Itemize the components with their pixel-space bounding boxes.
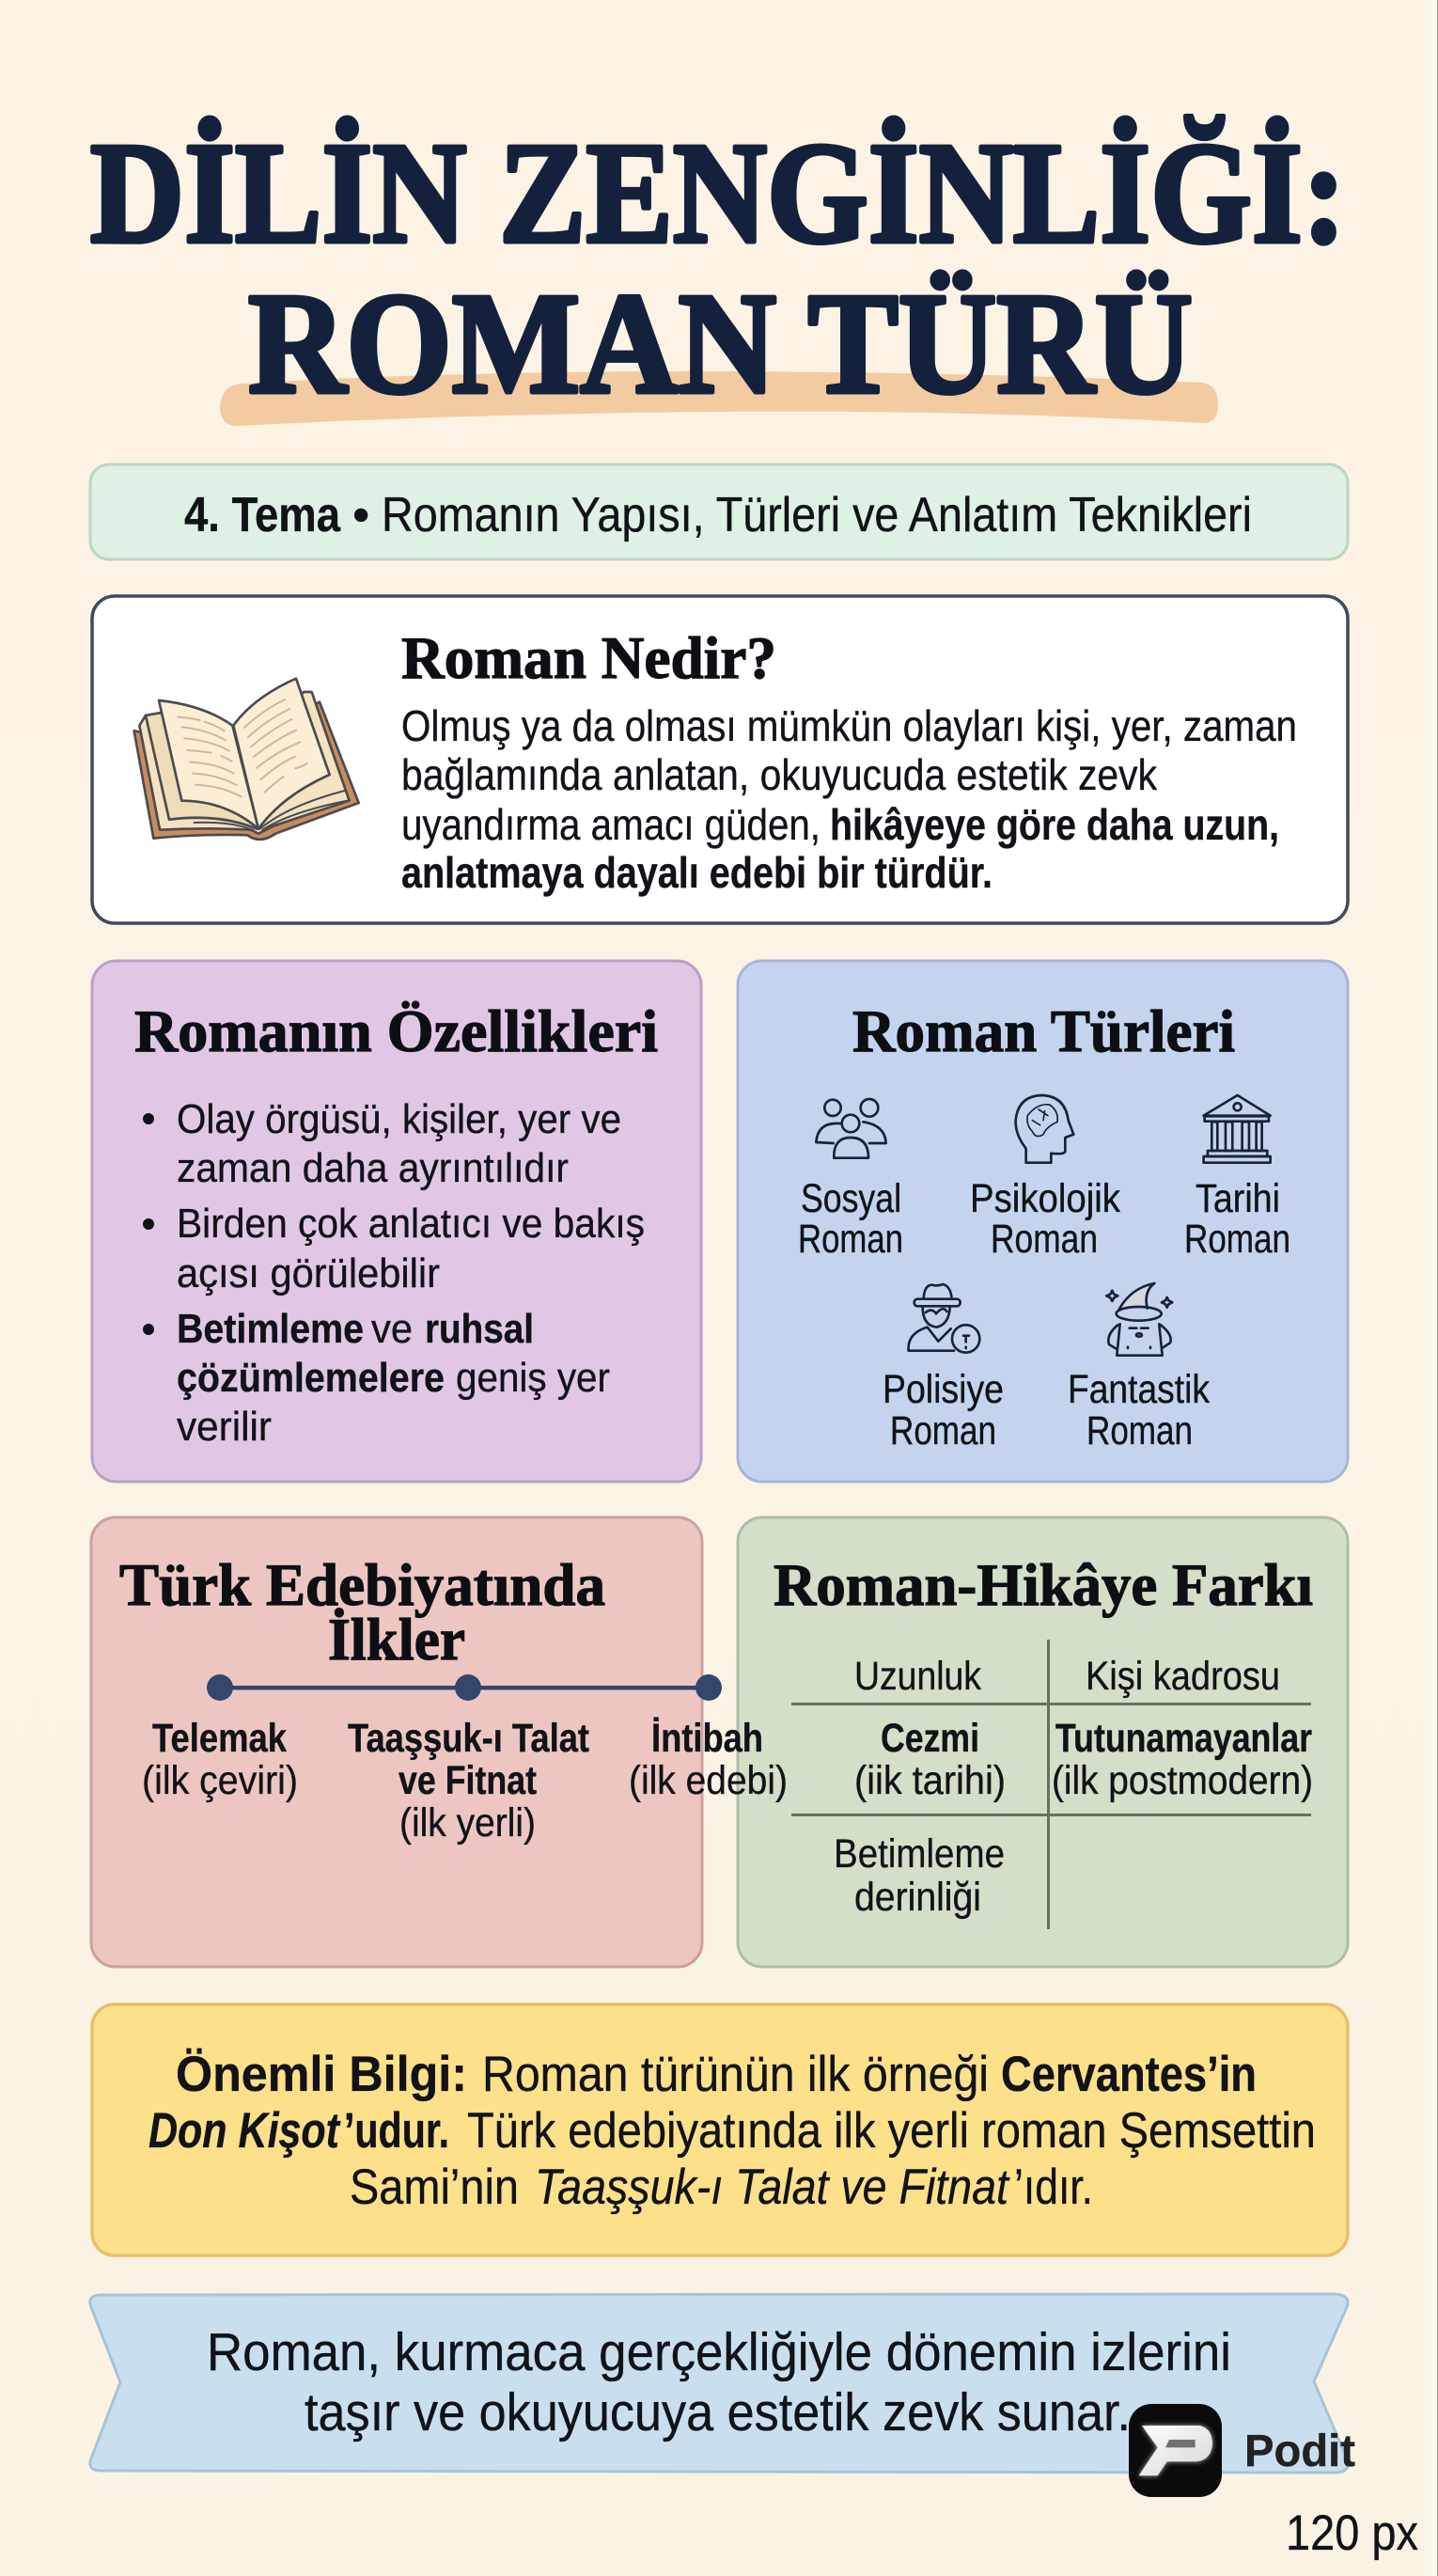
- title: ROMAN TÜRÜ: [248, 264, 1193, 424]
- ribbon: closing message: taşır ve okuyucuya estetik zevk sunar.: [305, 2382, 1131, 2442]
- bullet list: Birden çok anlatıcı ve bakış: [177, 1201, 645, 1247]
- timeline item: Taaşşuk-ı Talat ve Fitnat: [348, 1716, 589, 1846]
- subtitle band: [90, 464, 1348, 559]
- label: Polisiye Roman: Polisiye: [883, 1367, 1004, 1412]
- label: Fantastik Roman: Fantastik: [1068, 1367, 1210, 1412]
- definition text: bağlamında anlatan, okuyucuda estetik zevk: [401, 750, 1158, 799]
- icon: people: [816, 1099, 886, 1158]
- title: [90, 114, 1346, 424]
- title highlight stroke: [220, 371, 1218, 426]
- bullet list: geniş yer: [456, 1355, 610, 1401]
- timeline item: Taaşşuk-ı Talat ve Fitnat: Taaşşuk-ı Talat: [348, 1716, 589, 1761]
- panel: Roman Türleri: [738, 961, 1348, 1482]
- comparison table: [791, 1640, 1313, 1929]
- timeline item: Telemak: Telemak: [152, 1716, 287, 1761]
- timeline item: İntibah: İntibah: [651, 1716, 763, 1761]
- label: Fantastik Roman: Roman: [1086, 1408, 1193, 1453]
- ribbon: closing message: [90, 2294, 1348, 2473]
- bullet list: ruhsal: [425, 1306, 534, 1352]
- icon: open book: [134, 679, 359, 840]
- heading: Türk Edebiyatında İlkler: [119, 1552, 605, 1673]
- subtitle band: Romanın Yapısı, Türleri ve Anlatım Teknikleri: [382, 488, 1252, 542]
- logo: Podit: [1129, 2404, 1355, 2497]
- heading: Roman-Hikâye Farkı: Roman-Hikâye Farkı: [774, 1552, 1313, 1618]
- bullet list: zaman daha ayrıntılıdır: [177, 1145, 569, 1191]
- icon: head with brain: [1016, 1095, 1073, 1163]
- label: Psikolojik Roman: Roman: [991, 1217, 1098, 1262]
- definition text: Olmuş ya da olması mümkün olayları kişi, yer, zaman: [401, 701, 1297, 750]
- label: Tarihi Roman: Roman: [1184, 1217, 1290, 1262]
- callout: Önemli Bilgi: Don Kişot: [148, 2103, 341, 2159]
- bullet list: çözümlemelere: [177, 1355, 445, 1401]
- comparison table: Uzunluk: [854, 1654, 981, 1699]
- label: Tarihi Roman: [1184, 1176, 1290, 1262]
- comparison table: Betimleme: [834, 1831, 1005, 1877]
- definition text: uyandırma amacı güden,: [401, 800, 821, 849]
- heading: Roman Türleri: Roman Türleri: [852, 998, 1235, 1064]
- label: Polisiye Roman: [883, 1367, 1004, 1453]
- label: Sosyal Roman: [798, 1176, 903, 1262]
- comparison table: Cezmi: [881, 1716, 979, 1761]
- label: Sosyal Roman: Roman: [798, 1217, 903, 1262]
- panel: Roman-Hikâye Farkı: [738, 1517, 1348, 1967]
- comparison table: Tutunamayanlar: [1055, 1716, 1312, 1761]
- definition text: [401, 701, 1297, 897]
- heading: Türk Edebiyatında İlkler: Türk Edebiyatında: [119, 1552, 605, 1618]
- icon: temple: [1204, 1095, 1271, 1163]
- panel: Türk Edebiyatında İlkler: [91, 1517, 722, 1967]
- definition text: anlatmaya dayalı edebi bir türdür.: [401, 848, 993, 897]
- label: Tarihi Roman: Tarihi: [1196, 1176, 1280, 1221]
- timeline item: Telemak: [142, 1716, 298, 1803]
- comparison table: Kişi kadrosu: [1086, 1654, 1280, 1699]
- icon: wizard: [1106, 1283, 1172, 1356]
- heading: Roman Nedir: Roman Nedir?: [401, 625, 776, 691]
- label: Sosyal Roman: Sosyal: [801, 1176, 901, 1221]
- label: Psikolojik Roman: [970, 1176, 1120, 1262]
- bullet list: açısı görülebilir: [177, 1250, 440, 1296]
- timeline item: Taaşşuk-ı Talat ve Fitnat: (ilk yerli): [399, 1800, 536, 1846]
- callout: Önemli Bilgi: Sami’nin: [350, 2160, 519, 2215]
- size note: 120 px: [1286, 2505, 1418, 2561]
- timeline item: Taaşşuk-ı Talat ve Fitnat: ve Fitnat: [399, 1758, 537, 1803]
- icon: detective: [909, 1284, 979, 1353]
- callout: Önemli Bilgi: [92, 2004, 1348, 2255]
- timeline item: İntibah: (ilk edebi): [629, 1758, 788, 1803]
- label: Fantastik Roman: [1068, 1367, 1210, 1453]
- comparison table: derinliği: [854, 1875, 981, 1920]
- timeline item: İntibah: [629, 1716, 788, 1803]
- callout: Önemli Bilgi: ’udur.: [344, 2103, 449, 2159]
- bullet list: [143, 1096, 645, 1450]
- panel: Romanın Özellikleri: [92, 961, 701, 1482]
- timeline item: Telemak: (ilk çeviri): [142, 1758, 298, 1803]
- logo: Podit: Podit: [1244, 2427, 1355, 2476]
- comparison table: (iik tarihi): [854, 1758, 1006, 1803]
- heading: Türk Edebiyatında İlkler: İlkler: [328, 1607, 465, 1673]
- bullet list: ve: [371, 1306, 413, 1352]
- callout: Önemli Bilgi: ’ıdır.: [1014, 2160, 1093, 2215]
- label: Psikolojik Roman: Psikolojik: [970, 1176, 1120, 1221]
- heading: Romanın Özellikleri: Romanın Özellikleri: [134, 998, 658, 1064]
- definition text: hikâyeye göre daha uzun,: [830, 800, 1279, 849]
- subtitle band: •: [352, 488, 369, 542]
- callout: Önemli Bilgi: Taaşşuk-ı Talat ve Fitnat: [535, 2160, 1010, 2215]
- label: Polisiye Roman: Roman: [890, 1408, 996, 1453]
- callout: Önemli Bilgi: Roman türünün ilk örneği: [482, 2047, 989, 2102]
- callout: Önemli Bilgi: Cervantes’in: [1001, 2047, 1257, 2102]
- callout: Önemli Bilgi: Önemli Bilgi:: [176, 2047, 467, 2102]
- panel: Roman Nedir: [92, 596, 1348, 923]
- subtitle band: 4. Tema: [184, 488, 341, 542]
- bullet list: Betimleme: [177, 1306, 364, 1352]
- bullet list: Olay örgüsü, kişiler, yer ve: [177, 1096, 621, 1142]
- callout: Önemli Bilgi: Türk edebiyatında ilk yerli roman Şemsettin: [467, 2103, 1316, 2159]
- timeline: [207, 1674, 722, 1701]
- comparison table: (ilk postmodern): [1052, 1758, 1313, 1803]
- ribbon: closing message: Roman, kurmaca gerçekliğiyle dönemin izlerini: [207, 2322, 1231, 2382]
- bullet list: verilir: [177, 1404, 272, 1450]
